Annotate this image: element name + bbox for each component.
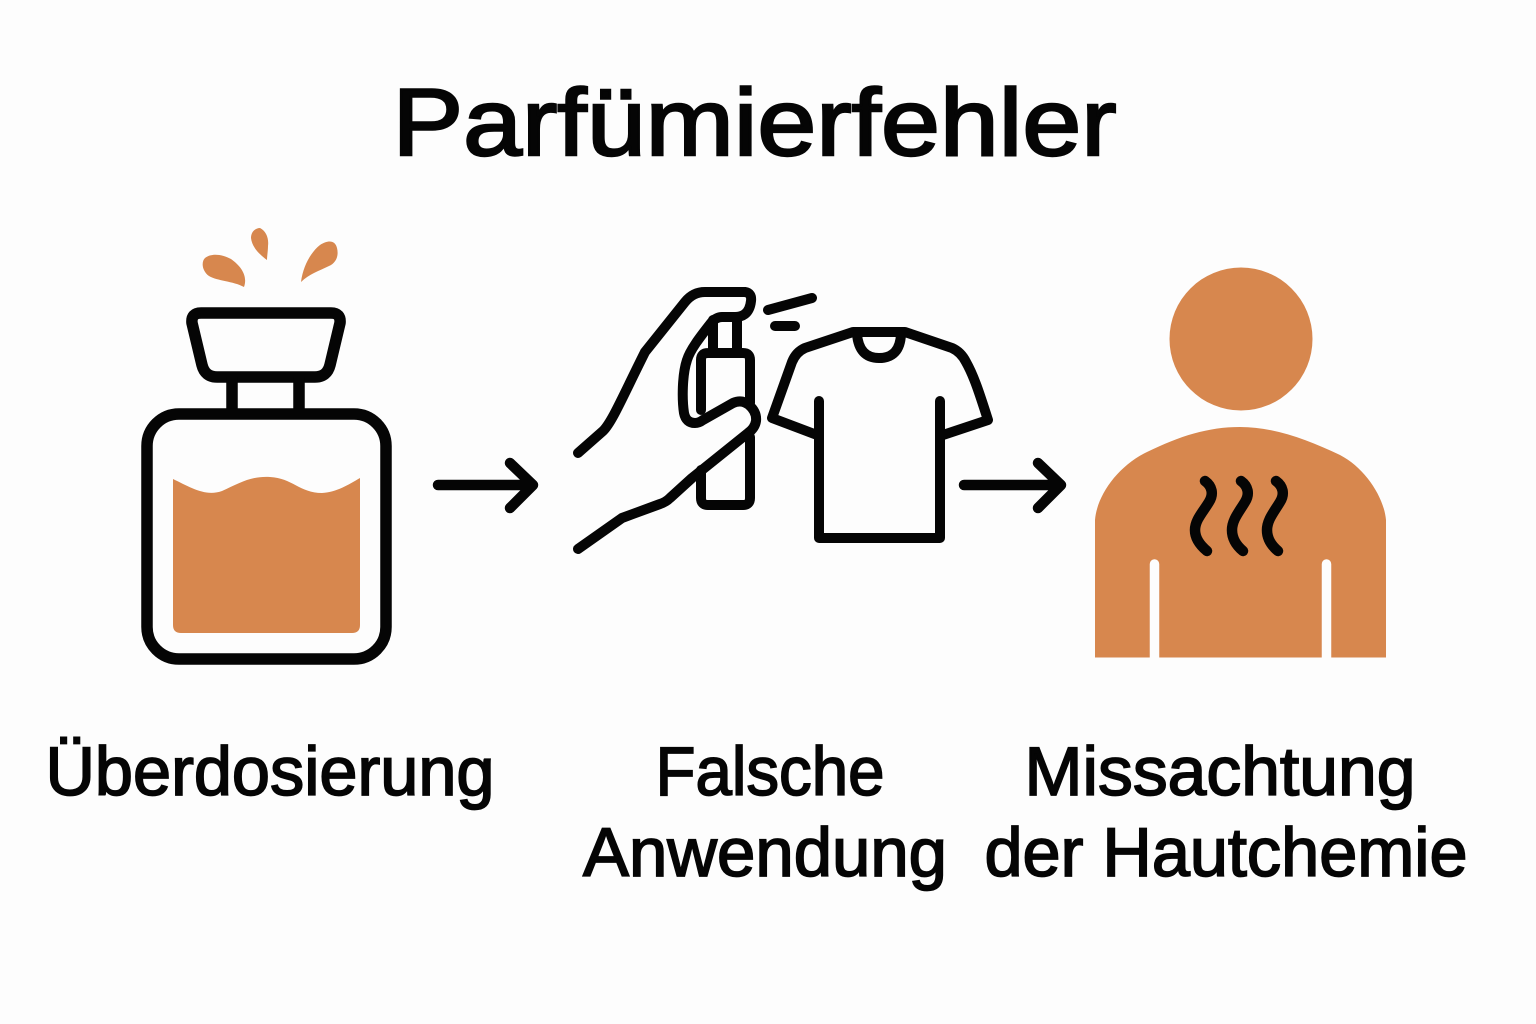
label: Missachtung der Hautchemie: Missachtung <box>1024 733 1416 810</box>
arm gaps <box>1154 564 1326 660</box>
bottle outline <box>147 313 386 659</box>
spray bottle <box>701 317 750 505</box>
label: Missachtung der Hautchemie: der Hautchemie <box>984 814 1468 891</box>
spray lines <box>768 298 812 326</box>
label: Falsche Anwendung: Anwendung <box>583 814 947 891</box>
icon: person with heat <box>1095 268 1386 660</box>
label: Falsche Anwendung <box>583 733 947 891</box>
bottle liquid <box>173 477 360 633</box>
t-shirt <box>772 332 988 538</box>
title: Parfümierfehler <box>392 70 1116 176</box>
label: Falsche Anwendung: Falsche <box>656 733 884 810</box>
body <box>1095 427 1386 658</box>
icon: perfume droplets <box>203 228 338 287</box>
arrow 1 <box>438 463 533 508</box>
icon: perfume bottle <box>147 228 386 659</box>
arrow 2 <box>964 463 1061 508</box>
heat waves <box>1195 481 1283 551</box>
hand <box>578 292 756 549</box>
label: Überdosierung: Überdosierung <box>46 733 494 810</box>
label: Missachtung der Hautchemie <box>984 733 1468 891</box>
icon: hand spraying on shirt <box>578 292 988 549</box>
head <box>1170 268 1312 410</box>
